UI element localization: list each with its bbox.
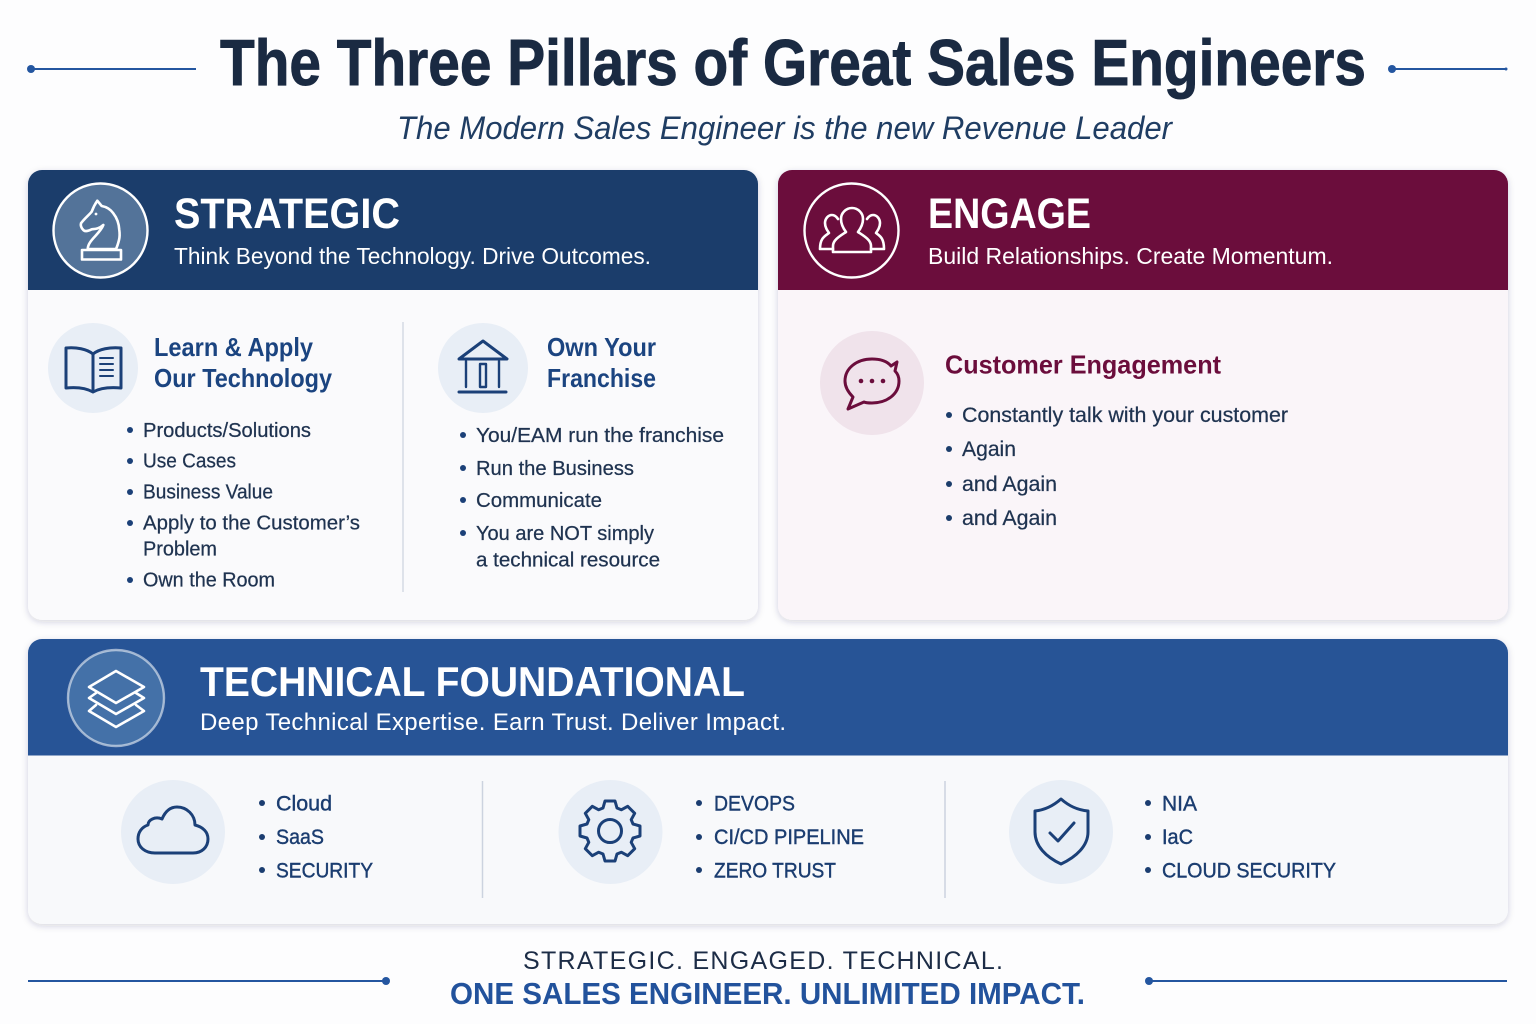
subheading: learn and apply [154, 332, 332, 393]
list: cloud: SECURITY [276, 860, 373, 882]
title rule left [27, 65, 196, 73]
list: learn and apply: Products/Solutions [143, 420, 311, 442]
list: cloud [259, 792, 373, 882]
footer rule left [28, 977, 390, 985]
icon: people [804, 184, 898, 278]
icon: temple [438, 323, 528, 413]
panel: technical foundational [28, 639, 1508, 924]
panel: strategic [28, 170, 758, 620]
footer line one: STRATEGIC. ENGAGED. TECHNICAL. [523, 947, 1003, 975]
list: customer engagement: Again [962, 438, 1016, 461]
subheading: own your franchise: Franchise [547, 363, 656, 393]
list: customer engagement: Constantly talk with your customer [962, 404, 1288, 427]
icon: gear [558, 780, 662, 884]
list: own your franchise: You are NOT simply [476, 523, 654, 545]
list: customer engagement: and Again [962, 473, 1057, 496]
title rule right [1388, 65, 1508, 73]
list: learn and apply: Use Cases [143, 450, 236, 472]
strategic tagline: Think Beyond the Technology. Drive Outcomes. [174, 243, 651, 269]
list: devops [696, 792, 864, 882]
subheading: own your franchise: Own Your [547, 332, 656, 362]
list: devops: CI/CD PIPELINE [714, 826, 864, 849]
list: security: NIA [1162, 792, 1197, 816]
strategic heading: STRATEGIC [174, 190, 400, 238]
list: own your franchise: Run the Business [476, 458, 634, 480]
subheading: learn and apply: Learn & Apply [154, 332, 313, 362]
subheading: learn and apply: Our Technology [154, 363, 332, 393]
panel: engage [778, 170, 1508, 620]
icon: cloud [121, 780, 225, 884]
list: security: CLOUD SECURITY [1162, 860, 1336, 882]
footer rule right [1145, 977, 1507, 985]
list: own your franchise [460, 425, 724, 572]
technical heading: TECHNICAL FOUNDATIONAL [200, 658, 745, 705]
subtitle: The Modern Sales Engineer is the new Revenue Leader [397, 110, 1173, 146]
list: security: IaC [1162, 826, 1193, 849]
subheading: customer engagement: Customer Engagement [945, 350, 1221, 380]
list: learn and apply: Business Value [143, 482, 273, 504]
technical header band [28, 639, 1508, 756]
icon: open book [48, 323, 138, 413]
list: devops: ZERO TRUST [714, 860, 836, 882]
list: own your franchise: a technical resource [476, 550, 660, 572]
engage header band [778, 170, 1508, 290]
engage heading: ENGAGE [928, 190, 1091, 238]
footer line two: ONE SALES ENGINEER. UNLIMITED IMPACT. [450, 976, 1085, 1011]
list: security [1145, 792, 1336, 882]
list: cloud: Cloud [276, 792, 332, 816]
list: customer engagement [946, 404, 1288, 530]
title: The Three Pillars of Great Sales Engineers [220, 26, 1366, 99]
technical tagline: Deep Technical Expertise. Earn Trust. Deliver Impact. [200, 709, 786, 736]
engage tagline: Build Relationships. Create Momentum. [928, 243, 1333, 269]
list: learn and apply [127, 420, 360, 592]
icon: layers [68, 650, 164, 746]
list: own your franchise: Communicate [476, 490, 602, 512]
list: cloud: SaaS [276, 826, 324, 849]
list: devops: DEVOPS [714, 792, 795, 816]
list: own your franchise: You/EAM run the franchise [476, 425, 724, 447]
strategic header band [28, 170, 758, 290]
subheading: own your franchise [547, 332, 656, 393]
list: learn and apply: Problem [143, 538, 217, 560]
icon: shield [1009, 780, 1113, 884]
list: learn and apply: Apply to the Customer’s [143, 512, 360, 534]
list: learn and apply: Own the Room [143, 570, 275, 592]
icon: speech bubble [820, 331, 924, 435]
list: customer engagement: and Again [962, 507, 1057, 530]
icon: chess knight [54, 184, 148, 278]
